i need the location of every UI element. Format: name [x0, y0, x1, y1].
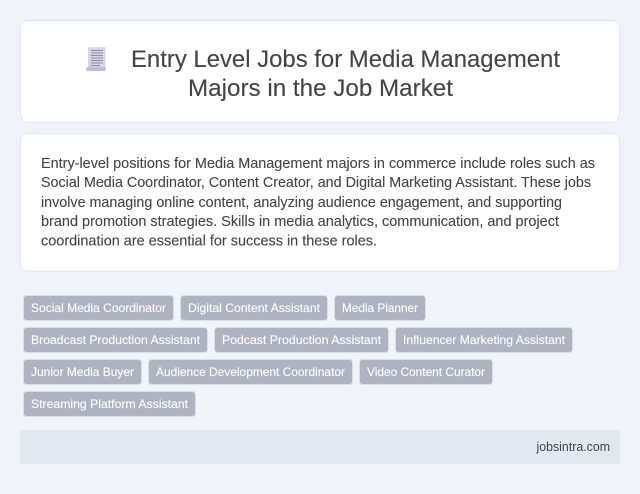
header panel	[20, 20, 620, 122]
tag: Podcast Production Assistant	[214, 328, 388, 352]
title	[131, 46, 560, 102]
tag: Digital Content Assistant	[180, 296, 328, 320]
tag list	[24, 296, 572, 416]
tag: Broadcast Production Assistant	[24, 328, 208, 352]
tag: Influencer Marketing Assistant	[396, 328, 572, 352]
description panel	[20, 134, 620, 271]
footer text: source: jobsintra.com	[536, 440, 610, 454]
icon: document scroll	[86, 47, 106, 71]
description text	[41, 156, 595, 250]
tag: Audience Development Coordinator: Audience Development Coordinator	[156, 365, 345, 379]
tag: Streaming Platform Assistant: Streaming Platform Assistant	[31, 397, 189, 411]
tag: Junior Media Buyer: Junior Media Buyer	[31, 365, 134, 379]
tag: Broadcast Production Assistant: Broadcast Production Assistant	[31, 333, 201, 347]
tag: Media Planner: Media Planner	[342, 301, 418, 315]
description text: Social Media Coordinator, Content Creator, and Digital Marketing Assistant. These jobs	[41, 175, 591, 191]
tag: Media Planner	[334, 296, 426, 320]
footer bar	[20, 430, 620, 464]
description text: involve managing online content, analyzing audience engagement, and supporting	[41, 195, 562, 211]
description text: Entry-level positions for Media Management majors in commerce include roles such as	[41, 156, 595, 172]
title: Majors in the Job Market	[188, 75, 453, 102]
title: Entry Level Jobs for Media Management	[131, 46, 560, 73]
tag: Podcast Production Assistant: Podcast Production Assistant	[222, 333, 382, 347]
tag: Video Content Curator	[360, 360, 492, 384]
tag: Junior Media Buyer	[24, 360, 142, 384]
description text: brand promotion strategies. Skills in media analytics, communication, and project	[41, 214, 559, 230]
tag: Influencer Marketing Assistant: Influencer Marketing Assistant	[403, 333, 566, 347]
description text: coordination are essential for success in these roles.	[41, 234, 377, 250]
tag: Social Media Coordinator	[24, 296, 174, 320]
tag: Video Content Curator: Video Content Curator	[367, 365, 485, 379]
tag: Audience Development Coordinator	[148, 360, 352, 384]
tag: Social Media Coordinator: Social Media Coordinator	[31, 301, 166, 315]
tag: Digital Content Assistant: Digital Content Assistant	[188, 301, 321, 315]
tag: Streaming Platform Assistant	[24, 392, 196, 416]
